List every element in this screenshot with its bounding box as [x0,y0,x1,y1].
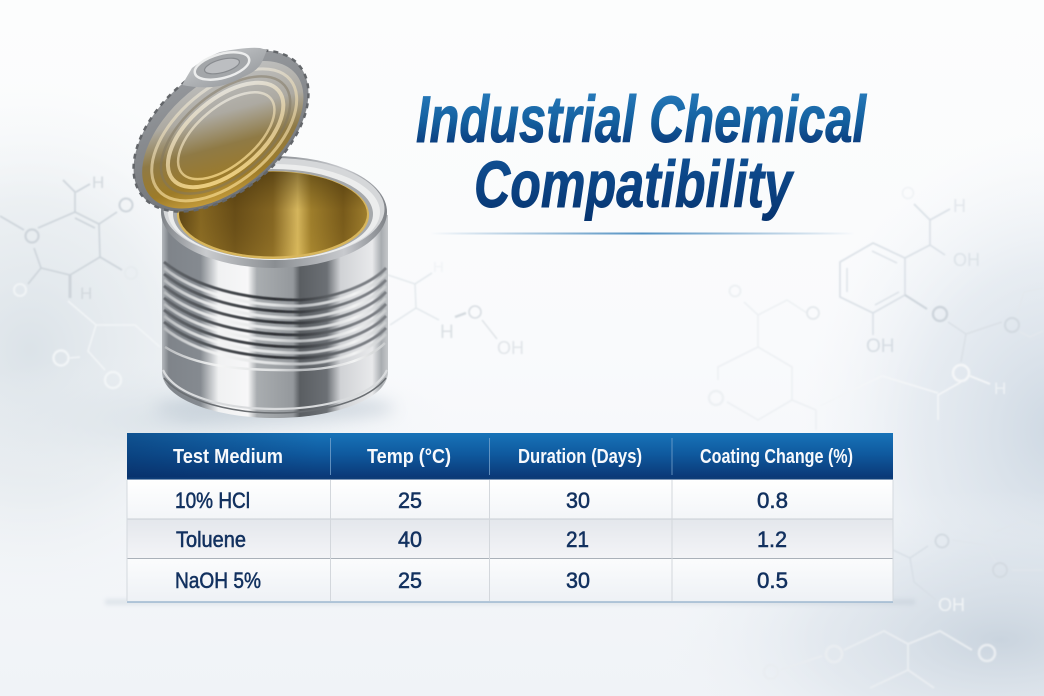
header labels: Test Medium [173,446,283,468]
title [416,82,867,221]
table row: Toluene: 21 [566,527,589,552]
label: H and OH atoms, centre molecule: H [440,322,454,343]
table row: Toluene [176,527,787,552]
label: H atoms, left molecule: H [92,173,104,192]
label: H and OH atoms, right molecule [866,196,1006,398]
table row: NaOH 5%: NaOH 5% [175,568,261,593]
label: H and OH atoms, right molecule: OH [953,250,980,270]
label: H and OH atoms, right molecule: OH [866,336,894,357]
table row: NaOH 5% [175,568,788,593]
label: H and OH atoms, centre molecule: H [433,259,444,276]
title line 2: Compatibility [474,147,795,221]
table row: 10% HCl: 0.8 [757,488,788,513]
can body [162,215,388,418]
table row: Toluene: Toluene [176,527,246,552]
can interior [177,171,369,259]
molecule: lower right background structure [764,521,1043,688]
molecule: right background structure [709,188,1043,430]
table row: 10% HCl [175,488,788,513]
lid inner face [115,32,330,237]
table header row [127,433,893,480]
header labels: Duration (Days) [518,446,642,468]
lid pull tab [182,47,267,87]
table row: 10% HCl: 25 [398,488,422,513]
header labels [173,446,853,468]
table body rows [127,480,893,602]
label: H atoms, left molecule: H [80,284,92,303]
molecule: upper left background structure [0,173,160,388]
title divider rule [430,232,855,234]
label: H and OH atoms, right molecule: H [953,196,966,216]
table [127,433,893,602]
label: H and OH atoms, centre molecule: OH [497,338,524,358]
label: OH atom, lower right molecule: OH [938,595,965,615]
table shadow [105,599,915,605]
icon: open tin can [104,19,395,422]
can lid [104,19,338,243]
table row: NaOH 5%: 0.5 [757,568,788,593]
table row: NaOH 5%: 25 [398,568,422,593]
table row: 10% HCl: 10% HCl [175,488,250,513]
table row: Toluene: 40 [398,527,422,552]
molecule: centre background structure [388,259,524,358]
table row: Toluene: 1.2 [757,527,787,552]
can rim [161,156,387,268]
label: H and OH atoms, right molecule: H [994,379,1006,398]
label: H and OH atoms, centre molecule [433,259,524,358]
label: H atoms, left molecule [80,173,104,303]
can ground shadow [155,394,395,422]
table row: NaOH 5%: 30 [566,568,590,593]
lid scalloped edge [104,19,338,243]
header labels: Coating Change (%) [700,446,853,468]
title line 1: Industrial Chemical [416,82,867,156]
table row: 10% HCl: 30 [566,488,590,513]
header labels: Temp (°C) [367,446,451,468]
can ribs [164,262,386,364]
